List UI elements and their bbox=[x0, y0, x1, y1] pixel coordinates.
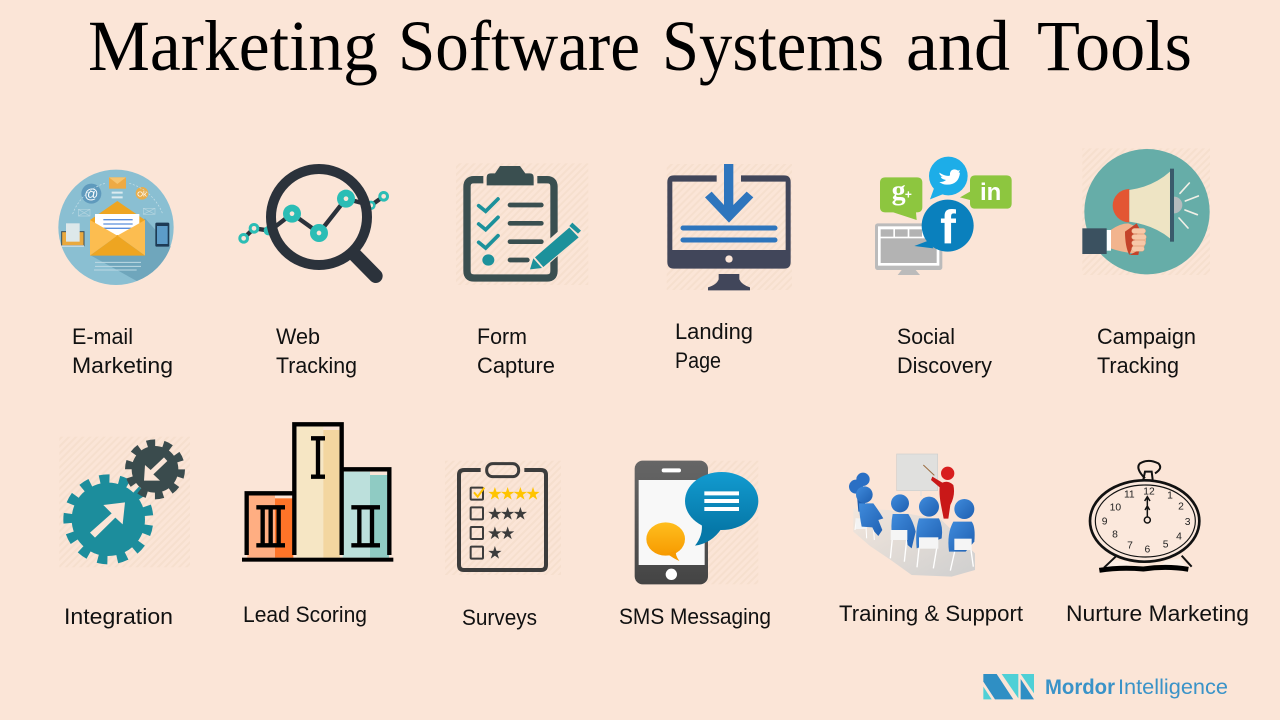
panel: surveys bbox=[445, 461, 561, 630]
floor bbox=[853, 508, 975, 577]
icon: sketched stopwatch: 8 bbox=[1112, 530, 1118, 541]
whiteboard bbox=[897, 454, 938, 496]
icon: monitor with download arrow bbox=[667, 164, 792, 290]
front audience bbox=[890, 494, 975, 571]
label: social discovery: Discovery bbox=[897, 353, 993, 378]
icon: sketched stopwatch: 11 bbox=[1124, 489, 1135, 500]
icon: magnifier over line chart bbox=[238, 169, 389, 276]
icon: survey clipboard with stars: ★★★★ bbox=[489, 487, 539, 503]
title: Systems bbox=[662, 6, 884, 86]
icon: survey clipboard with stars: ★★★ bbox=[489, 506, 527, 522]
icon: social network bubbles: + bbox=[905, 188, 912, 202]
icon: social network bubbles bbox=[875, 157, 1012, 275]
label: landing page bbox=[675, 319, 753, 373]
panel: integration bbox=[59, 437, 190, 629]
label: landing page: Landing bbox=[675, 319, 753, 344]
icon: sketched stopwatch: 5 bbox=[1163, 540, 1169, 551]
trainer bbox=[923, 465, 954, 519]
logo mark bbox=[983, 674, 1034, 699]
label: e-mail marketing bbox=[72, 324, 173, 378]
icon: survey clipboard with stars: ★ bbox=[489, 546, 501, 562]
label: e-mail marketing: Marketing bbox=[72, 353, 173, 378]
icon: sketched stopwatch bbox=[1090, 461, 1199, 570]
title: Software bbox=[398, 6, 640, 86]
logo wordmark: Intelligence bbox=[1118, 676, 1228, 699]
icon: e-mail envelope bbox=[58, 170, 174, 285]
panel: landing page bbox=[667, 164, 792, 373]
title: Marketing bbox=[88, 6, 378, 86]
panel: form capture bbox=[456, 163, 588, 378]
icon: social network bubbles: g bbox=[892, 175, 906, 206]
label: sms messaging: SMS Messaging bbox=[619, 604, 771, 629]
label: training and support: Training & Support bbox=[839, 601, 1024, 626]
icon: sketched stopwatch: 12 bbox=[1143, 486, 1155, 497]
title: Tools bbox=[1037, 6, 1192, 86]
icon: survey clipboard with stars bbox=[445, 461, 561, 575]
label: lead scoring: Lead Scoring bbox=[243, 602, 367, 627]
label: surveys: Surveys bbox=[462, 605, 537, 630]
icon: social network bubbles: in bbox=[980, 179, 1001, 206]
panel: sms messaging bbox=[619, 461, 771, 629]
logo: mordor intelligence bbox=[983, 674, 1228, 699]
icon: social network bubbles: f bbox=[940, 201, 956, 254]
icon: phone with speech bubbles bbox=[635, 461, 758, 584]
label: social discovery bbox=[897, 324, 993, 378]
icon: sketched stopwatch: 7 bbox=[1127, 540, 1133, 551]
icon: sketched stopwatch: 2 bbox=[1178, 501, 1184, 512]
label: social discovery: Social bbox=[897, 324, 955, 349]
label: nurture marketing: Nurture Marketing bbox=[1066, 601, 1249, 626]
label: form capture bbox=[477, 324, 555, 378]
label: integration: Integration bbox=[64, 604, 173, 629]
label: form capture: Form bbox=[477, 324, 527, 349]
title: and bbox=[906, 6, 1010, 86]
icon: sketched stopwatch: 10 bbox=[1110, 502, 1121, 513]
label: campaign tracking: Campaign bbox=[1097, 324, 1196, 349]
icon: sketched stopwatch: 4 bbox=[1176, 531, 1182, 542]
label: e-mail marketing: E-mail bbox=[72, 324, 133, 349]
icon: sketched stopwatch: 3 bbox=[1185, 517, 1191, 528]
panel: social discovery bbox=[875, 157, 1012, 378]
label: web tracking: Tracking bbox=[276, 353, 357, 378]
label: campaign tracking: Tracking bbox=[1097, 353, 1179, 378]
icon: trainer and audience bbox=[849, 454, 975, 577]
icon: e-mail envelope: Ok bbox=[137, 189, 147, 198]
panel: nurture marketing bbox=[1066, 461, 1249, 626]
label: landing page: Page bbox=[675, 348, 721, 373]
icon: gears with arrows bbox=[59, 437, 190, 567]
panel: lead scoring bbox=[242, 424, 393, 627]
icon: sketched stopwatch: 1 bbox=[1167, 490, 1173, 501]
icon: sketched stopwatch: 9 bbox=[1102, 516, 1108, 527]
icon: sketched stopwatch: 6 bbox=[1144, 544, 1150, 555]
label: form capture: Capture bbox=[477, 353, 555, 378]
panel: training and support bbox=[839, 454, 1024, 626]
icon: survey clipboard with stars: ★★ bbox=[489, 526, 514, 542]
panel: web tracking bbox=[238, 169, 389, 378]
icon: ranking podium bbox=[242, 424, 393, 562]
left audience group bbox=[849, 473, 883, 540]
label: web tracking bbox=[276, 324, 357, 378]
logo wordmark: Mordor bbox=[1045, 676, 1115, 699]
label: web tracking: Web bbox=[276, 324, 320, 349]
icon: clipboard with pencil bbox=[456, 163, 588, 285]
panel: e-mail marketing bbox=[58, 170, 174, 378]
label: campaign tracking bbox=[1097, 324, 1196, 378]
panel: campaign tracking bbox=[1082, 148, 1210, 378]
icon: megaphone in hand bbox=[1082, 148, 1210, 275]
icon: e-mail envelope: @ bbox=[84, 185, 98, 201]
